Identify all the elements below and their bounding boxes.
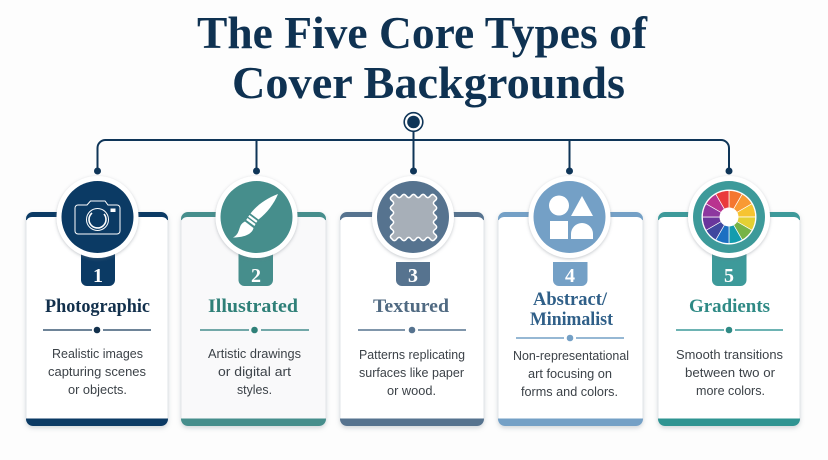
card 1 [26,212,168,426]
card 5 [658,212,800,426]
title: Cover Backgrounds [232,57,625,108]
description 2: or digital art [218,364,291,379]
badge 5 [712,250,746,287]
description 1: or objects. [68,382,127,397]
icon: camera [56,176,138,258]
connector tree [94,130,732,174]
description 4: forms and colors. [521,384,618,399]
panel: textured [340,176,484,426]
heading: photographic: Photographic [45,297,150,317]
heading: gradients: Gradients [689,297,770,317]
icon: color wheel [688,176,770,258]
divider 5 [676,327,783,333]
description 5: between two or [685,365,776,380]
icon: shapes [528,176,610,258]
title [197,7,648,108]
description 5 [676,347,783,398]
heading: illustrated: Illustrated [208,297,299,317]
panel: photographic [26,176,168,426]
divider 4 [516,335,624,341]
description 3: Patterns replicating [359,347,465,362]
description 3: or wood. [387,383,436,398]
description 2: styles. [237,382,272,397]
description 5: Smooth transitions [676,347,783,362]
badge 3: 3 [408,265,418,287]
title: The Five Core Types of [197,7,648,58]
card 3 [340,212,484,426]
icon: fabric swatch [372,176,454,258]
description 4: art focusing on [528,366,612,381]
divider 1 [43,327,151,333]
card 4 [498,212,643,426]
panel: gradients [658,176,800,426]
card 2 [181,212,326,426]
description 1: capturing scenes [48,364,146,379]
description 4 [513,348,629,399]
divider 3 [358,327,466,333]
description 3 [359,347,465,398]
badge 1 [81,250,115,287]
heading: abstract minimalist: Minimalist [530,310,614,330]
badge 5: 5 [724,265,734,287]
description 4: Non-representational [513,348,629,363]
description 1: Realistic images [52,346,143,361]
heading: textured: Textured [373,297,450,317]
top node [404,113,423,131]
description 3: surfaces like paper [359,365,465,380]
description 5: more colors. [696,383,765,398]
badge 4: 4 [565,265,575,287]
description 1 [48,346,146,397]
description 2: Artistic drawings [208,346,301,361]
icon: paint brush [216,176,298,258]
badge 2: 2 [251,265,261,287]
panel: illustrated [181,176,326,426]
badge 3 [396,262,430,287]
divider 2 [200,327,309,333]
badge 4 [553,262,588,287]
description 2 [208,346,301,397]
heading: abstract minimalist [530,290,614,330]
badge 1: 1 [93,265,103,287]
heading: abstract minimalist: Abstract/ [533,290,608,310]
panel: abstract / minimalist [498,176,643,426]
badge 2 [238,250,273,287]
